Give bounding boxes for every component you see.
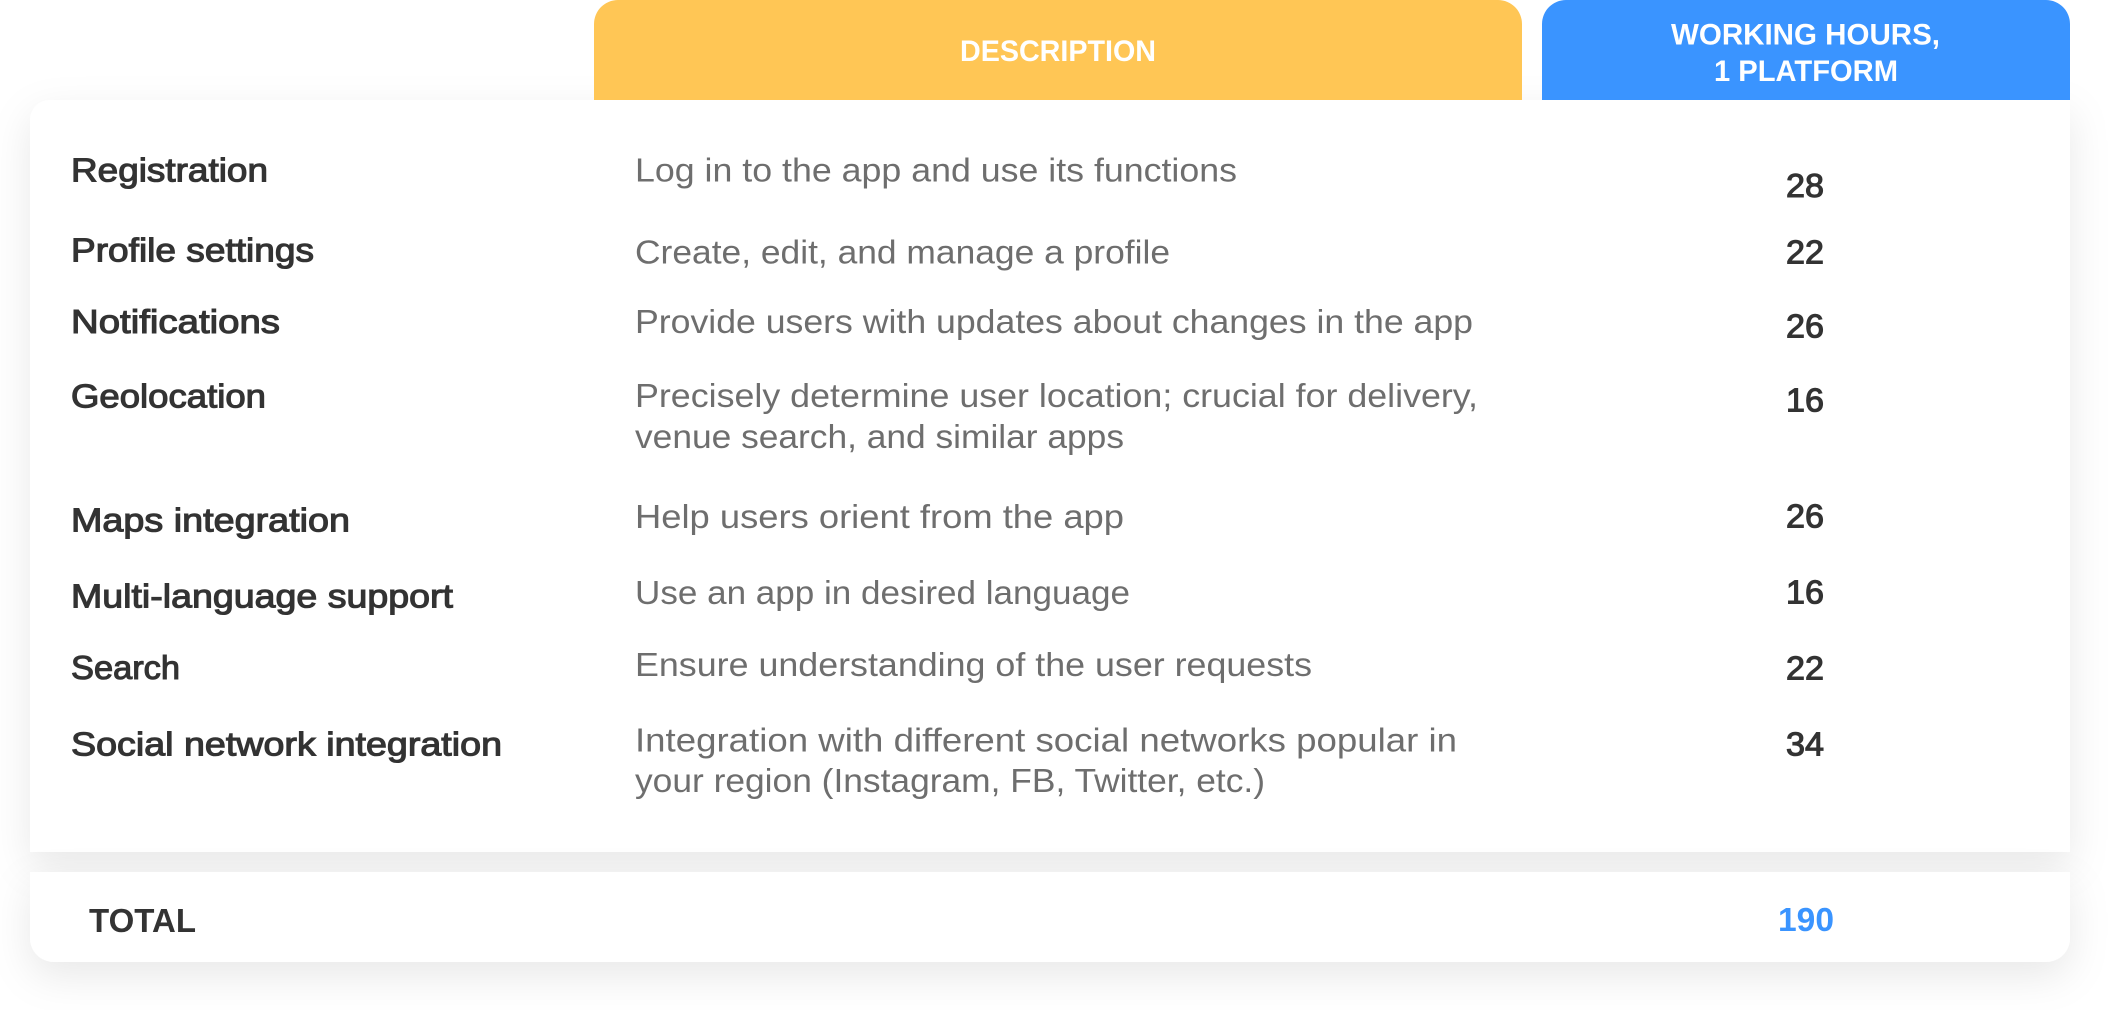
row: search: Search [71, 649, 180, 686]
row: profile settings: 22 [1786, 234, 1824, 270]
row: multi-language support: Multi-language support [71, 578, 453, 614]
row: geolocation: Precisely determine user location; crucial for delivery, [635, 377, 1478, 414]
row: maps integration: Help users orient from the app [635, 498, 1124, 535]
row: notifications: Provide users with updates about changes in the app [635, 303, 1473, 340]
row: geolocation: Geolocation [71, 378, 266, 414]
row: registration: Registration [71, 152, 268, 188]
header: working hours tab [1542, 0, 2070, 100]
row: maps integration [71, 498, 1824, 538]
row: profile settings: Create, edit, and manage a profile [635, 234, 1170, 270]
row: social network integration: 34 [1786, 726, 1824, 762]
panel: total card [30, 872, 2070, 962]
total label: TOTAL [89, 902, 196, 939]
row: multi-language support [71, 574, 1824, 614]
row: registration: Log in to the app and use its functions [635, 152, 1237, 188]
row: geolocation: venue search, and similar apps [635, 418, 1124, 455]
row: geolocation [71, 377, 1824, 455]
row: multi-language support: 16 [1786, 574, 1824, 610]
row: profile settings: Profile settings [71, 232, 314, 268]
row: social network integration: Social network integration [71, 726, 502, 762]
row: social network integration: your region (Instagram, FB, Twitter, etc.) [635, 762, 1265, 799]
row: multi-language support: Use an app in desired language [635, 574, 1130, 611]
row: notifications: 26 [1786, 308, 1824, 344]
row: geolocation: 16 [1786, 382, 1824, 418]
row: maps integration: 26 [1786, 498, 1824, 534]
row: notifications [71, 303, 1824, 344]
row: social network integration [71, 722, 1824, 799]
header: description tab [594, 0, 1522, 100]
total value: 190 [1778, 901, 1834, 938]
row: registration [71, 152, 1824, 204]
row: search: 22 [1786, 650, 1824, 686]
row: maps integration: Maps integration [71, 502, 350, 538]
row: search: Ensure understanding of the user requests [635, 646, 1312, 683]
panel: features table card [30, 100, 2070, 852]
header: working hours tab: WORKING HOURS, [1671, 18, 1940, 52]
header: working hours tab: 1 PLATFORM [1714, 55, 1898, 88]
row: notifications: Notifications [71, 303, 280, 340]
row: social network integration: Integration with different social networks popular in [635, 722, 1457, 758]
header: description tab: DESCRIPTION [960, 35, 1156, 68]
row: registration: 28 [1786, 167, 1824, 204]
row: profile settings [71, 232, 1824, 270]
row: search [71, 646, 1824, 686]
